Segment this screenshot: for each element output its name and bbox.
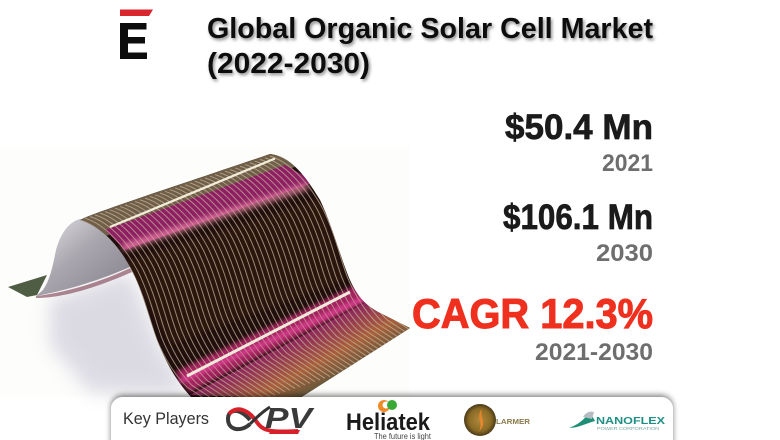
logo: E mark [120, 10, 153, 59]
logo: XPV: PV [265, 403, 315, 435]
stat: 2021 market value [505, 108, 653, 177]
stat: 2021 market value: $50.4 Mn [505, 108, 653, 147]
stat: 2021 market value: 2021 [602, 150, 653, 177]
stat: 2030 market value: $106.1 Mn [503, 198, 653, 237]
title [207, 13, 653, 80]
logo: Heliatek: Heliatek [346, 409, 431, 436]
logo: Solarmer [464, 404, 531, 436]
key players label: Key Players [123, 410, 209, 428]
logo: Nanoflex: NANOFLEX [596, 416, 665, 427]
stat: CAGR [412, 290, 653, 366]
logo: Nanoflex: POWER CORPORATION [597, 426, 659, 431]
stat: CAGR: CAGR 12.3% [412, 290, 653, 337]
image: organic solar cell sheet [8, 154, 410, 399]
logo: XPV [228, 403, 315, 435]
title: (2022-2030) [207, 48, 370, 80]
logo: Nanoflex [569, 412, 665, 431]
stat: CAGR: 2021-2030 [535, 339, 653, 366]
panel: key players [111, 397, 673, 440]
logo: Solarmer: LARMER [496, 417, 531, 426]
stat: 2030 market value [503, 198, 653, 267]
logo: Heliatek [346, 400, 432, 440]
stat: 2030 market value: 2030 [596, 240, 653, 267]
title: Global Organic Solar Cell Market [207, 13, 653, 45]
